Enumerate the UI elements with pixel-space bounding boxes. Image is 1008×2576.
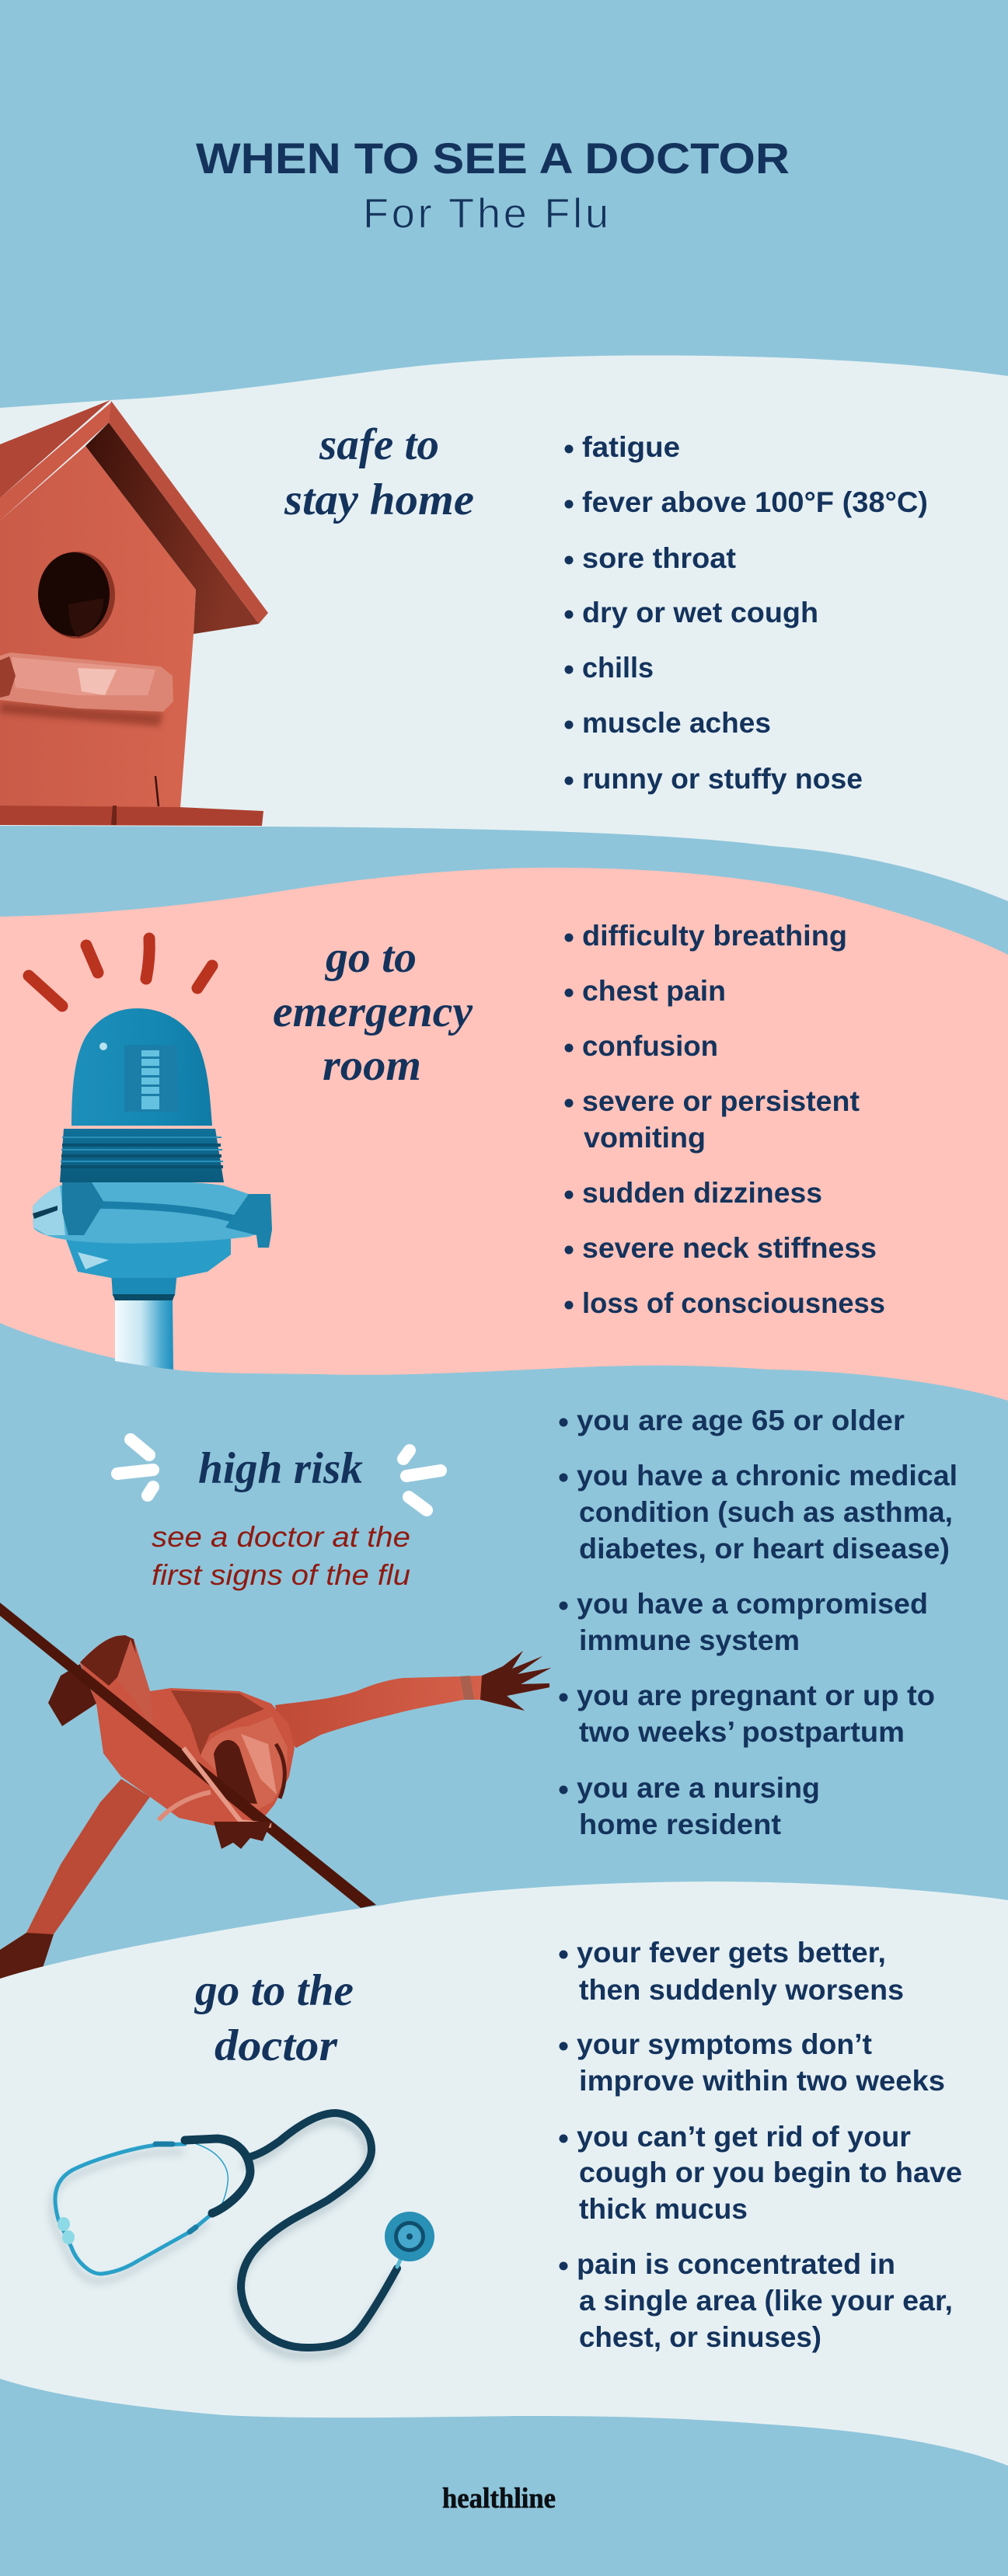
icon: birdhouse [0,400,268,826]
list: when to go to the doctor: pain is concentrated in [577,2248,895,2280]
list: emergency symptoms: severe neck stiffness [582,1232,877,1264]
list: high risk groups [560,1405,957,1840]
panel: safe to stay home [0,356,1008,901]
list: when to go to the doctor: thick mucus [579,2193,748,2225]
list: emergency symptoms: chest pain [582,975,726,1007]
icon: stethoscope [52,2113,434,2355]
icon: white emphasis marks [117,1439,441,1510]
list: high risk groups: you are pregnant or up to [577,1680,935,1711]
title: WHEN TO SEE A DOCTOR [196,134,790,183]
list: when to go to the doctor: your fever gets better, [577,1937,886,1969]
list: when to go to the doctor: improve within two weeks [579,2065,945,2097]
list: high risk groups: two weeks’ postpartum [579,1716,905,1748]
list: high risk groups: you have a compromised [577,1588,928,1620]
list: when to go to the doctor: chest, or sinuses) [579,2321,821,2353]
list: emergency symptoms: loss of consciousness [582,1287,885,1319]
list: safe to stay home symptoms: chills [582,652,654,684]
list: safe to stay home symptoms: muscle aches [582,707,771,739]
subheading: see a doctor [152,1521,410,1591]
subheading: see a doctor: see a doctor at the [152,1521,410,1553]
list: when to go to the doctor: a single area (like your ear, [579,2285,953,2317]
list: emergency symptoms: confusion [582,1030,718,1062]
heading: safe to stay home: stay home [284,475,474,524]
list: safe to stay home symptoms [564,431,928,795]
list: emergency symptoms [564,920,885,1319]
list: when to go to the doctor: you can’t get rid of your [577,2121,911,2153]
icon: alarm marks [29,938,212,1006]
panel: go to emergency room [0,868,1008,1401]
title [196,134,790,237]
list: emergency symptoms: vomiting [584,1122,706,1154]
list: when to go to the doctor: your symptoms don’t [577,2028,872,2060]
icon: emergency beacon light [33,1008,272,1370]
logo: healthline: healthline [442,2483,556,2515]
list: high risk groups: immune system [579,1624,800,1656]
list: high risk groups: home resident [579,1808,781,1840]
list: when to go to the doctor [560,1937,962,2353]
list: when to go to the doctor: then suddenly worsens [579,1974,904,2006]
list: safe to stay home symptoms: dry or wet cough [582,597,818,628]
list: emergency symptoms: severe or persistent [582,1085,860,1117]
list: high risk groups: you are age 65 or older [577,1405,905,1436]
list: high risk groups: you have a chronic medical [577,1460,957,1492]
heading: go to emergency room: room [323,1041,421,1090]
heading: go to emergency room: go to [324,933,417,982]
list: high risk groups: condition (such as asthma, [579,1496,953,1528]
heading: go to emergency room [273,933,473,1090]
list: emergency symptoms: difficulty breathing [582,920,847,952]
icon: tightrope walker [0,1603,551,1982]
list: safe to stay home symptoms: fever above 100°F (38°C) [582,486,928,518]
heading: safe to stay home [284,420,474,524]
list: high risk groups: diabetes, or heart disease) [579,1533,950,1565]
subheading: see a doctor: first signs of the flu [152,1559,410,1591]
list: safe to stay home symptoms: sore throat [582,542,736,574]
list: emergency symptoms: sudden dizziness [582,1177,822,1209]
list: when to go to the doctor: cough or you begin to have [579,2157,962,2188]
heading: go to the doctor: go to the [194,1966,354,2015]
list: safe to stay home symptoms: fatigue [582,431,680,463]
list: high risk groups: you are a nursing [577,1772,820,1804]
panel: go to the doctor [0,1882,1008,2466]
heading: go to the doctor [194,1966,354,2070]
heading: high risk: high risk [198,1444,363,1493]
heading: go to emergency room: emergency [273,987,473,1036]
list: safe to stay home symptoms: runny or stuffy nose [582,763,863,795]
heading: safe to stay home: safe to [319,420,439,469]
heading: go to the doctor: doctor [215,2021,338,2070]
subtitle: For The Flu [363,190,609,237]
